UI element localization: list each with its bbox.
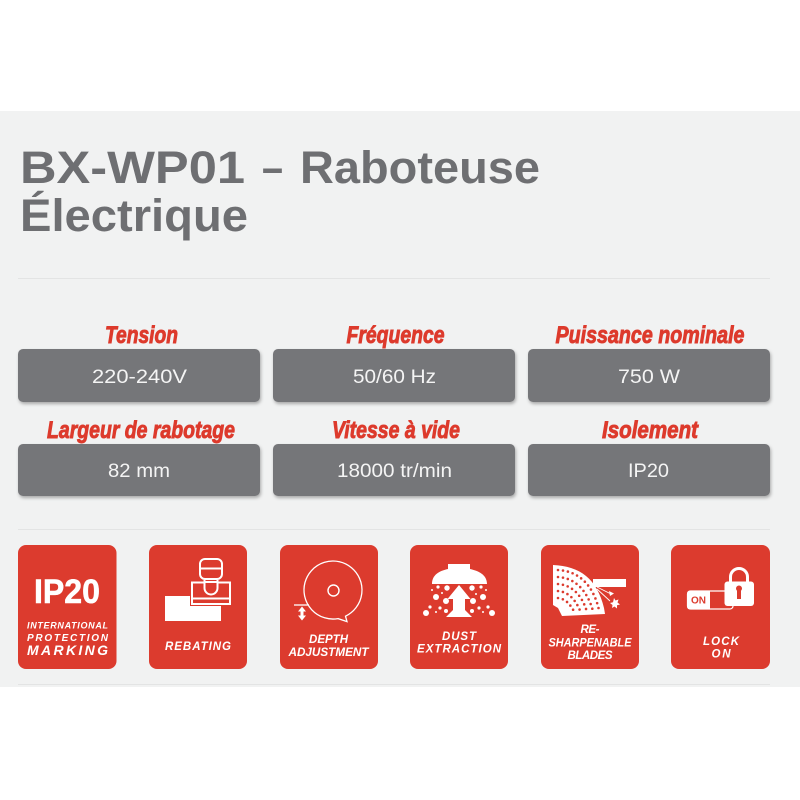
title: – bbox=[262, 142, 283, 193]
badge: dust extraction: DUST bbox=[442, 631, 477, 643]
badge: re-sharpenable blades: RE- bbox=[580, 624, 600, 636]
spec: Fréquence bbox=[273, 322, 515, 402]
spec: Isolement: Isolement bbox=[602, 417, 699, 444]
badge: rebating bbox=[149, 545, 247, 669]
badge: IP20: MARKING bbox=[27, 642, 108, 658]
badge: IP20: PROTECTION bbox=[27, 633, 109, 644]
spec: Tension bbox=[18, 322, 260, 402]
icon: padlock switch: ON bbox=[691, 596, 706, 606]
badge: re-sharpenable blades bbox=[541, 545, 639, 669]
title: BX-WP01 bbox=[20, 142, 245, 193]
badge: lock on bbox=[671, 545, 770, 669]
badge: re-sharpenable blades: SHARPENABLE bbox=[548, 638, 632, 650]
title bbox=[20, 142, 540, 241]
spec: Tension: Tension bbox=[105, 322, 178, 349]
badge: dust extraction bbox=[410, 545, 508, 669]
spec: Fréquence: Fréquence bbox=[346, 322, 444, 349]
title: Raboteuse bbox=[300, 142, 540, 193]
badge: lock on: ON bbox=[712, 648, 731, 660]
spec: Isolement bbox=[528, 417, 770, 496]
badge: depth adjustment bbox=[280, 545, 378, 669]
spec: Puissance nominale: 750 W bbox=[618, 366, 681, 388]
spec: Largeur de rabotage bbox=[18, 417, 260, 496]
icon: dust hood bbox=[423, 564, 495, 617]
title: Électrique bbox=[20, 190, 248, 241]
spec: Tension: 220-240V bbox=[92, 366, 187, 388]
icon: depth wheel bbox=[294, 561, 362, 622]
panel: feature badges bbox=[18, 545, 770, 669]
badge: rebating: REBATING bbox=[165, 641, 231, 653]
spec: Puissance nominale bbox=[528, 322, 770, 402]
spec: Puissance nominale: Puissance nominale bbox=[556, 322, 744, 349]
panel: specifications bbox=[18, 322, 770, 496]
badge: IP20 bbox=[18, 545, 116, 669]
spec: Largeur de rabotage: 82 mm bbox=[108, 460, 170, 482]
spec: Largeur de rabotage: Largeur de rabotage bbox=[47, 417, 235, 444]
spec: Vitesse à vide: 18000 tr/min bbox=[337, 460, 452, 482]
badge: IP20: IP20 bbox=[34, 573, 100, 611]
spec: Isolement: IP20 bbox=[628, 460, 669, 482]
panel: background bbox=[0, 111, 800, 687]
spec: Fréquence: 50/60 Hz bbox=[353, 366, 436, 388]
spec: Vitesse à vide bbox=[273, 417, 515, 496]
badge: IP20: INTERNATIONAL bbox=[27, 620, 108, 630]
icon: rebating plane bbox=[165, 559, 230, 621]
badge: re-sharpenable blades: BLADES bbox=[568, 650, 613, 662]
icon: blade drum bbox=[553, 565, 626, 616]
badge: depth adjustment: ADJUSTMENT bbox=[287, 647, 369, 659]
badge: lock on: LOCK bbox=[703, 636, 740, 648]
badge: dust extraction: EXTRACTION bbox=[417, 644, 502, 656]
badge: depth adjustment: DEPTH bbox=[309, 634, 349, 646]
spec: Vitesse à vide: Vitesse à vide bbox=[332, 417, 460, 444]
